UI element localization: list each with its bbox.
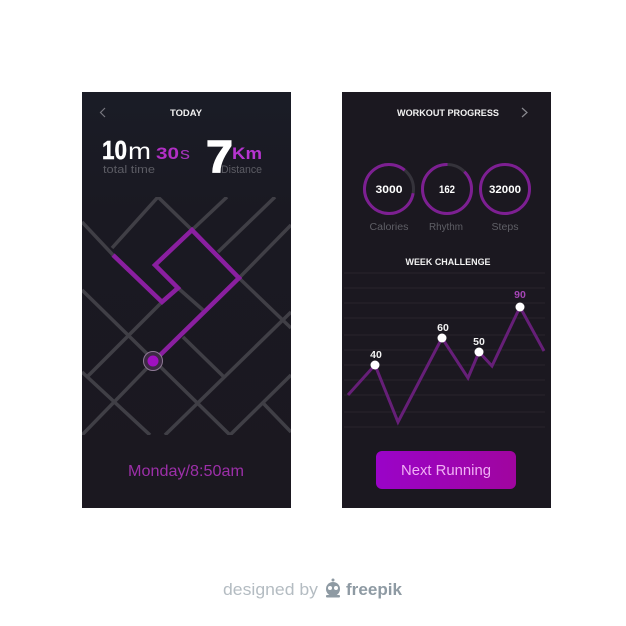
heading: workout progress: WORKOUT PROGRESS [397, 108, 499, 119]
icon: back chevron [100, 108, 105, 117]
ring: rhythm [412, 154, 482, 233]
stat: total time [102, 135, 190, 176]
stat: distance: Distance [221, 164, 262, 176]
panel: workout progress [342, 92, 551, 508]
stat: distance [206, 131, 262, 182]
ring: calories [361, 161, 417, 233]
button: next running: Next Running [401, 462, 491, 479]
icon: freepik mascot [326, 578, 340, 598]
line chart: week challenge: 50 [473, 336, 485, 348]
stat: total time: 10 [102, 135, 127, 165]
stat: distance: 7 [206, 131, 233, 182]
ring: calories: Calories [370, 222, 408, 233]
ring: rhythm: 162 [439, 184, 455, 196]
line chart: week challenge: 90 [514, 289, 526, 301]
footer: attribution: freepik [346, 580, 403, 599]
stat: total time: 30 [156, 144, 179, 163]
ring: steps: Steps [492, 222, 518, 233]
ring: steps: 32000 [489, 184, 521, 196]
stat: total time: total time [103, 164, 155, 176]
ring: calories: 3000 [376, 184, 402, 196]
map: purple route [113, 230, 239, 362]
heading: week challenge: WEEK CHALLENGE [406, 257, 490, 268]
footer: attribution: designed by [223, 580, 319, 599]
stat: total time: m [128, 138, 151, 164]
line chart: week challenge: 60 [437, 322, 449, 334]
ring: steps [480, 164, 530, 233]
map: street grid [82, 197, 291, 435]
panel: today [82, 92, 291, 508]
icon: forward chevron [522, 108, 527, 117]
line chart: week challenge [344, 273, 545, 427]
button: next running [376, 451, 516, 489]
ring: rhythm: Rhythm [429, 222, 463, 233]
text: date and time: Monday/8:50am [128, 463, 244, 480]
footer: attribution [223, 578, 403, 599]
heading: today: TODAY [170, 108, 203, 119]
stat: total time: s [180, 144, 190, 163]
icon: location marker [144, 352, 162, 370]
infographic canvas [82, 92, 551, 598]
stat: distance: Km [232, 144, 262, 163]
line chart: week challenge: 40 [370, 349, 382, 361]
